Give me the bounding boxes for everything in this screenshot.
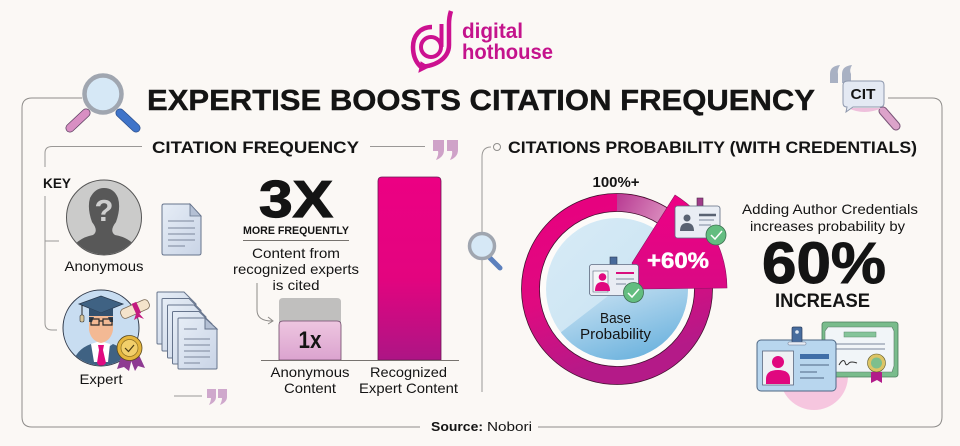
- icon: stack of documents: [157, 292, 217, 369]
- center ID card: [590, 257, 644, 302]
- stat description: Content from: [252, 245, 340, 261]
- more frequently: MORE FREQUENTLY: [243, 225, 350, 237]
- diploma: [119, 297, 151, 321]
- 3X stat: [233, 171, 359, 293]
- 3X number: 3X: [259, 171, 333, 229]
- glasses: [91, 319, 112, 325]
- bar labels: [270, 364, 458, 396]
- 100% label: 100%+: [592, 174, 640, 191]
- base probability label: Probability: [580, 327, 652, 343]
- title: EXPERTISE BOOSTS CITATION FREQUENCY: [147, 85, 815, 117]
- source: Source:: [431, 419, 483, 434]
- bar labels: Content: [284, 380, 336, 396]
- expert label: Expert: [80, 371, 123, 387]
- axis: [261, 360, 459, 362]
- icon: bottom closing quote: [207, 389, 227, 405]
- arrow to anonymous bar: [257, 283, 273, 324]
- +60% label: +60%: [647, 248, 709, 273]
- stat description: recognized experts: [233, 261, 359, 277]
- logo wordmark: hothouse: [462, 41, 553, 64]
- donut chart: [522, 194, 727, 384]
- 60% number: 60%: [762, 231, 886, 296]
- bar labels: Anonymous: [270, 364, 350, 380]
- stat description: [233, 245, 359, 293]
- mortar board: [79, 296, 123, 313]
- base probability disc: [546, 218, 688, 360]
- bar: anonymous 1x: [279, 321, 341, 360]
- callout: credentials text: increases probability by: [750, 218, 905, 234]
- ring: [530, 202, 704, 376]
- section node: [494, 144, 500, 150]
- bar: recognized expert: [378, 177, 441, 360]
- logo mark: [413, 11, 451, 72]
- ID card: [757, 340, 836, 391]
- bar value: 1x: [298, 327, 322, 354]
- base probability label: [580, 311, 652, 343]
- wedge ID card: [675, 198, 726, 245]
- logo: digital hothouse: [413, 11, 553, 72]
- logo wordmark: [462, 20, 553, 64]
- outer frame: [22, 98, 942, 427]
- callout: credentials text: [742, 201, 918, 234]
- heading: citations probability: CITATIONS PROBABILITY (WITH CREDENTIALS): [508, 138, 917, 157]
- gown: [76, 344, 121, 366]
- bar labels: Expert Content: [359, 380, 458, 396]
- certificate: [822, 322, 898, 377]
- base probability label: Base: [600, 311, 631, 327]
- award ribbon: [117, 355, 145, 371]
- icon: anonymous avatar: ?: [95, 193, 113, 228]
- heading: citation frequency: CITATION FREQUENCY: [152, 138, 360, 157]
- face: [89, 316, 113, 343]
- pink glow: [780, 376, 848, 410]
- icon: expert avatar: [63, 290, 151, 371]
- icon: center magnifying glass: [470, 234, 500, 268]
- logo wordmark: digital: [462, 20, 523, 43]
- tie: [97, 345, 106, 366]
- icon: CIT speech bubble with quotes: [830, 65, 896, 126]
- award badge: [117, 336, 142, 360]
- illustration: ID card and certificate: [757, 322, 898, 410]
- icon: single document: [162, 204, 201, 255]
- key bracket and section lines: [45, 146, 491, 396]
- icon: magnifying glass left: [70, 76, 136, 128]
- callout: credentials text: Adding Author Credentials: [742, 201, 918, 217]
- key label: KEY: [43, 175, 72, 191]
- source: Nobori: [487, 419, 532, 434]
- stat description: is cited: [272, 277, 320, 293]
- CIT label: CIT: [850, 86, 876, 103]
- source: [431, 419, 532, 434]
- increase label: INCREASE: [775, 291, 870, 312]
- +60% wedge: [632, 195, 727, 289]
- anonymous label: Anonymous: [64, 258, 144, 274]
- bar labels: Recognized: [370, 364, 447, 380]
- bar: anonymous gray: [279, 298, 341, 360]
- ring lighter segment: [617, 194, 690, 239]
- seal: [871, 372, 882, 383]
- icon: top closing quote: [433, 140, 458, 160]
- bar chart: [261, 177, 459, 396]
- icon: anonymous avatar: [66, 180, 142, 255]
